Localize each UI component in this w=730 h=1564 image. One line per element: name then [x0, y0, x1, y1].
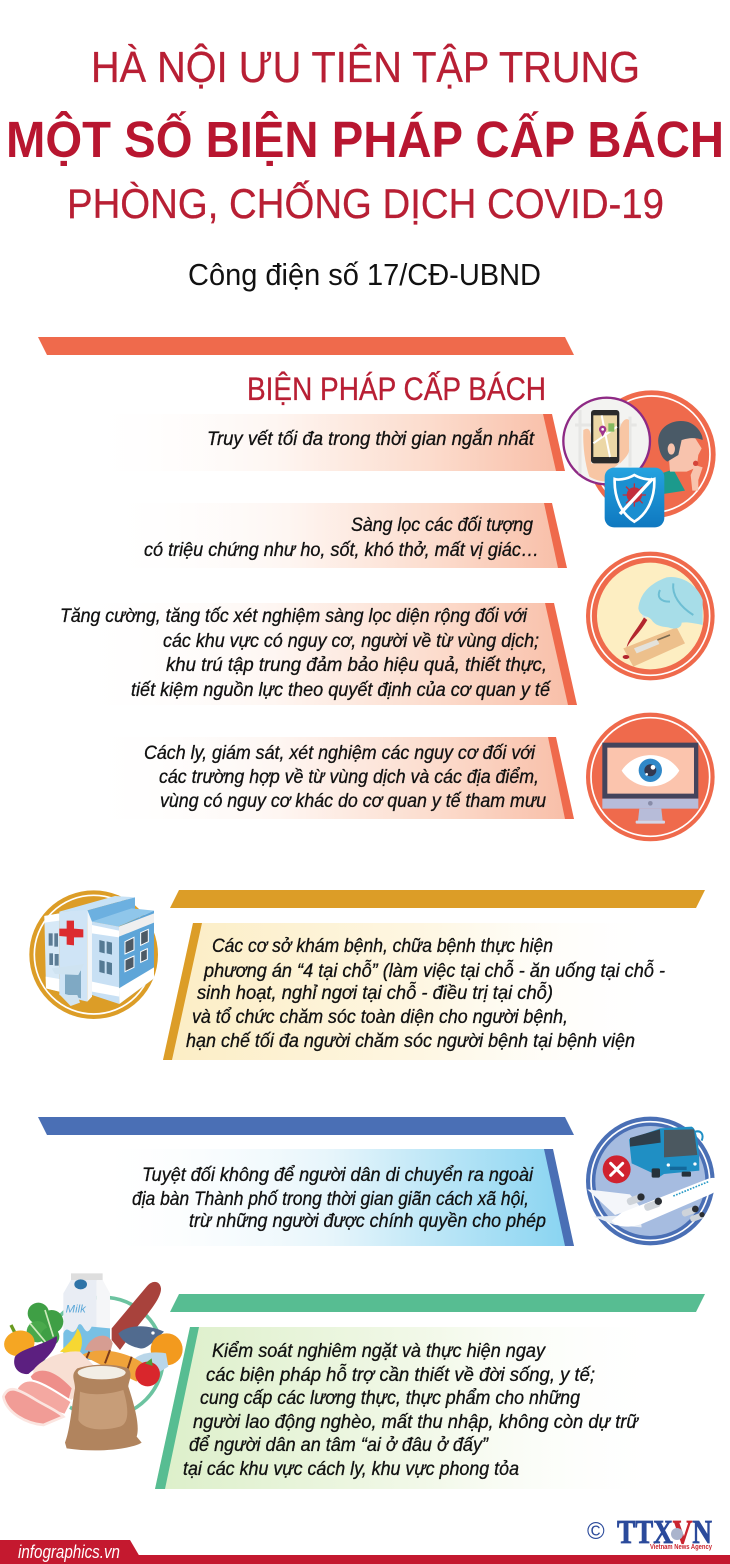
- title line 3: PHÒNG, CHỐNG DỊCH COVID-19: [67, 179, 664, 227]
- subtitle: Công điện số 17/CĐ-UBND: [188, 257, 541, 292]
- yellow section bar: [170, 890, 705, 908]
- icon: bus and plane: [586, 1117, 720, 1245]
- text: support: các biện pháp hỗ trợ cần thiết về đời sống, y tế;: [206, 1365, 595, 1386]
- panel: tracing: [80, 414, 565, 471]
- text: tracing: Truy vết tối đa trong thời gian ngắn nhất: [207, 429, 535, 450]
- logo tagline: Vietnam News Agency: [650, 1544, 712, 1551]
- logo globe: [671, 1528, 683, 1540]
- panel: screening: [100, 503, 567, 568]
- text: travel ban: [132, 1165, 546, 1232]
- text: hospitals: [186, 936, 665, 1052]
- text: testing: khu trú tập trung đảm bảo hiệu quả, thiết thực,: [166, 655, 547, 676]
- panel: support: [155, 1327, 670, 1489]
- panel: isolation: [80, 737, 574, 819]
- text: support: cung cấp các lương thực, thực phẩm cho những: [200, 1388, 580, 1409]
- icon: food supplies: [2, 1273, 183, 1450]
- text: testing: Tăng cường, tăng tốc xét nghiệm sàng lọc diện rộng đối với: [60, 606, 528, 627]
- text: travel ban: trừ những người được chính quyền cho phép: [189, 1211, 546, 1232]
- text: support: Kiểm soát nghiêm ngặt và thực hiện ngay: [212, 1341, 546, 1362]
- panel: hospitals: [163, 923, 665, 1060]
- text: screening: có triệu chứng như ho, sốt, khó thở, mất vị giác…: [144, 540, 539, 561]
- green section bar: [170, 1294, 705, 1312]
- text: isolation: Cách ly, giám sát, xét nghiệm các nguy cơ đối với: [144, 743, 536, 764]
- icon: monitor with eye: [586, 713, 715, 841]
- logo: TTXVN: TTXVN: [617, 1514, 712, 1551]
- text: support: người lao động nghèo, mất thu nhập, không còn dự trữ: [193, 1412, 640, 1433]
- icon: hospital: [29, 890, 158, 1019]
- text: support: [183, 1341, 640, 1480]
- text: screening: Sàng lọc các đối tượng: [351, 515, 533, 536]
- text: hospitals: và tổ chức chăm sóc toàn diện cho người bệnh,: [192, 1007, 568, 1028]
- icon: blood test: [586, 552, 715, 680]
- text: isolation: vùng có nguy cơ khác do cơ quan y tế tham mưu: [160, 791, 546, 812]
- text: hospitals: hạn chế tối đa người chăm sóc người bệnh tại bệnh viện: [186, 1031, 635, 1052]
- section heading: BIỆN PHÁP CẤP BÁCH: [247, 371, 546, 407]
- footer bar: [0, 1540, 730, 1564]
- text: screening: [144, 515, 539, 561]
- text: testing: [60, 606, 551, 701]
- text: travel ban: địa bàn Thành phố trong thời gian giãn cách xã hội,: [132, 1189, 529, 1210]
- title block: [6, 42, 724, 292]
- text: testing: các khu vực có nguy cơ, người về từ vùng dịch;: [163, 631, 539, 652]
- text: travel ban: Tuyệt đối không để người dân di chuyển ra ngoài: [142, 1165, 534, 1186]
- orange section bar: [38, 337, 574, 355]
- icon: tracing app and coughing person: [563, 390, 716, 527]
- copyright mark: ©: [587, 1518, 605, 1545]
- footer site name: infographics.vn: [18, 1542, 120, 1562]
- text: hospitals: Các cơ sở khám bệnh, chữa bệnh thực hiện: [212, 936, 553, 957]
- text: isolation: các trường hợp về từ vùng dịch và các địa điểm,: [159, 767, 539, 788]
- text: testing: tiết kiệm nguồn lực theo quyết định của cơ quan y tế: [131, 680, 551, 701]
- text: support: tại các khu vực cách ly, khu vực phong tỏa: [183, 1459, 519, 1480]
- icon: food supplies: Milk: [66, 1303, 87, 1315]
- panel: travel ban: [90, 1149, 574, 1246]
- text: isolation: [144, 743, 546, 812]
- text: hospitals: phương án “4 tại chỗ” (làm việc tại chỗ - ăn uống tại chỗ -: [203, 961, 665, 982]
- title line 1: HÀ NỘI ƯU TIÊN TẬP TRUNG: [91, 42, 640, 92]
- panel: testing: [60, 603, 577, 705]
- blue section bar: [38, 1117, 574, 1135]
- text: hospitals: sinh hoạt, nghỉ ngơi tại chỗ - điều trị tại chỗ): [197, 983, 553, 1004]
- text: support: để người dân an tâm “ai ở đâu ở đấy”: [189, 1435, 490, 1456]
